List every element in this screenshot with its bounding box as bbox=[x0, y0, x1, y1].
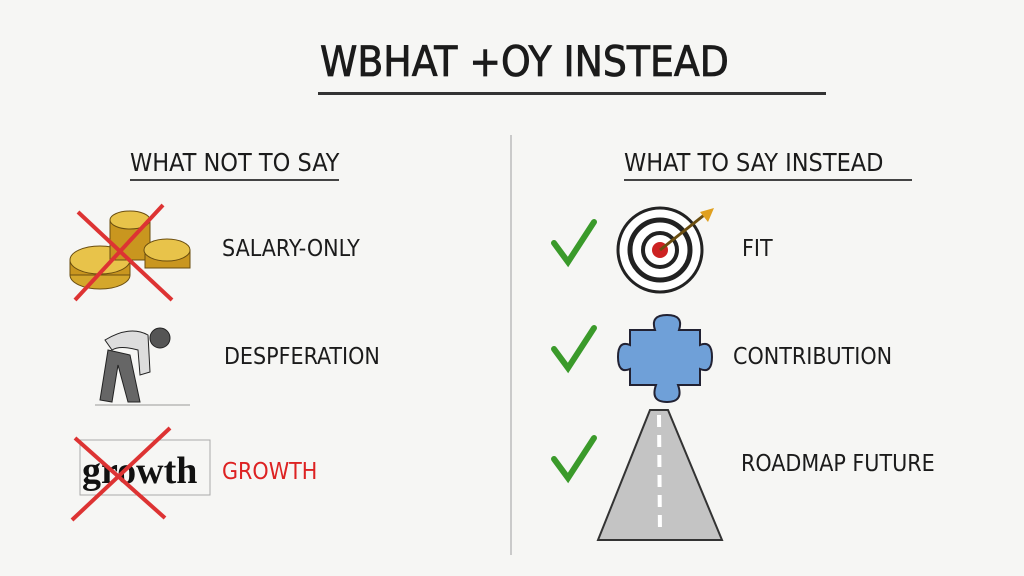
icon: crossed coins bbox=[70, 205, 190, 300]
icon: road bbox=[598, 410, 722, 540]
label: salary-only: SALARY-ONLY bbox=[222, 236, 360, 262]
title bbox=[318, 37, 826, 95]
label: growth red: GROWTH bbox=[222, 459, 317, 485]
label: despferation: DESPFERATION bbox=[224, 344, 380, 370]
heading: what to say instead: WHAT TO SAY INSTEAD bbox=[624, 148, 884, 177]
label: roadmap future: ROADMAP FUTURE bbox=[741, 451, 935, 477]
heading: what not to say: WHAT NOT TO SAY bbox=[130, 148, 339, 177]
icon: target bbox=[618, 208, 714, 292]
title: WBHAT +OY INSTEAD bbox=[320, 37, 729, 86]
icon: crossed growth word: growth bbox=[82, 450, 197, 492]
icons: checkmarks bbox=[554, 222, 594, 478]
icon: bent man bbox=[95, 328, 190, 405]
icon: crossed growth word bbox=[72, 428, 210, 520]
icon: puzzle piece bbox=[618, 315, 712, 402]
label: contribution: CONTRIBUTION bbox=[733, 344, 892, 370]
label: fit: FIT bbox=[742, 236, 773, 262]
